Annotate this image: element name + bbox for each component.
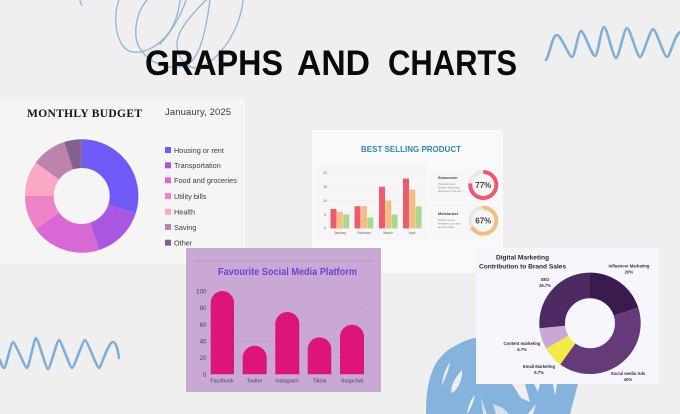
chart labels: marketing: 6.7% — [517, 347, 527, 352]
card: moisturizer: 67% — [475, 217, 491, 226]
date label: Januaury, 2025 — [165, 107, 231, 118]
legend: budget categories: Utility bills — [174, 192, 207, 201]
chart labels: marketing: 40% — [624, 377, 632, 382]
title — [145, 44, 517, 83]
grouped bar chart: sales: 20 — [323, 171, 327, 175]
bar chart: platforms: Tiktok — [313, 378, 327, 384]
grouped bar chart: sales: 10 — [323, 199, 327, 203]
chart labels: marketing: 26.7% — [539, 283, 551, 288]
bar chart: platforms: 100 — [196, 288, 207, 296]
donut chart: budget — [39, 154, 124, 238]
chart labels: marketing: Influencer Marketing — [609, 264, 650, 268]
scribble: bottom left wave — [0, 338, 119, 369]
legend: budget categories: Health — [174, 208, 195, 216]
bar chart: platforms: Snapchat — [341, 378, 364, 384]
grouped bar chart: sales — [318, 166, 427, 240]
chart labels: marketing: Email Marketing — [523, 364, 555, 369]
bar chart: platforms: 20 — [200, 355, 207, 362]
legend: budget categories: Saving — [174, 223, 196, 232]
heading: digital marketing — [479, 254, 566, 270]
chart labels: marketing: Social media Ads — [611, 371, 646, 376]
heading: best selling product: BEST SELLING PRODUCT — [361, 144, 461, 154]
scribble: top right wave — [546, 27, 680, 60]
card: sunscreen: 77% — [475, 181, 491, 190]
heading: digital marketing: Digital Marketing — [496, 254, 549, 262]
grouped bar chart: sales: 5 — [324, 213, 326, 217]
chart labels: marketing: SEO — [541, 277, 550, 282]
legend: budget categories: Other — [174, 238, 193, 248]
grouped bar chart: sales: January — [334, 231, 346, 235]
legend: budget categories: Housing or rent — [174, 146, 224, 155]
grouped bar chart: sales: 0 — [324, 226, 326, 230]
card: sunscreen: Sunscreen — [438, 176, 458, 180]
legend: budget categories: Food and groceries — [174, 176, 237, 185]
heading: monthly budget: MONTHLY BUDGET — [27, 108, 142, 120]
panel: favourite social media platform — [186, 248, 381, 392]
bar chart: platforms: 60 — [200, 322, 207, 329]
bar chart: platforms — [196, 288, 364, 384]
title: GRAPHS — [145, 44, 283, 83]
panel: best selling product — [312, 130, 503, 273]
chart labels: marketing: 6.7% — [534, 370, 544, 375]
card: sunscreen — [431, 169, 499, 202]
grouped bar chart: sales: April — [409, 231, 416, 235]
card: moisturizer — [431, 204, 499, 238]
panel: digital marketing — [476, 248, 659, 384]
donut chart: marketing — [552, 285, 628, 361]
grouped bar chart: sales: March — [383, 231, 393, 235]
chart labels: marketing: Content marketing — [504, 341, 541, 346]
card: moisturizer: Moisturizer — [438, 212, 459, 216]
title: AND — [297, 44, 370, 83]
bar chart: platforms: 0 — [203, 372, 207, 379]
legend: budget categories — [165, 146, 237, 248]
grouped bar chart: sales: 15 — [323, 185, 327, 189]
panel: monthly budget — [0, 99, 245, 264]
scribble: bottom blue crayon — [426, 338, 578, 414]
legend: budget categories: Transportation — [174, 161, 221, 170]
scribble: top loops — [80, 0, 243, 68]
bar chart: platforms: 80 — [200, 305, 207, 312]
bar chart: platforms: 40 — [200, 338, 207, 346]
card: moisturizer: between your skin — [438, 222, 461, 226]
card: moisturizer: Fill the layout — [438, 218, 455, 222]
heading: favourite social media platform: Favourite Social Media Platform — [218, 267, 357, 278]
chart labels: marketing — [504, 264, 650, 382]
bar chart: platforms: Facebook — [210, 378, 234, 384]
title: CHARTS — [388, 44, 517, 83]
card: moisturizer: and the dryer — [438, 225, 455, 229]
chart labels: marketing: 20% — [625, 270, 633, 274]
bar chart: platforms: Twitter — [247, 378, 263, 384]
bar chart: platforms: Instagram — [275, 378, 299, 384]
card: sunscreen: Presenting an — [438, 182, 456, 186]
grouped bar chart: sales: February — [357, 231, 371, 235]
card: sunscreen: sidebar that helps — [438, 186, 461, 190]
heading: digital marketing: Contribution to Brand Sales — [479, 264, 566, 270]
card: sunscreen: diamond in the sun — [438, 189, 462, 193]
